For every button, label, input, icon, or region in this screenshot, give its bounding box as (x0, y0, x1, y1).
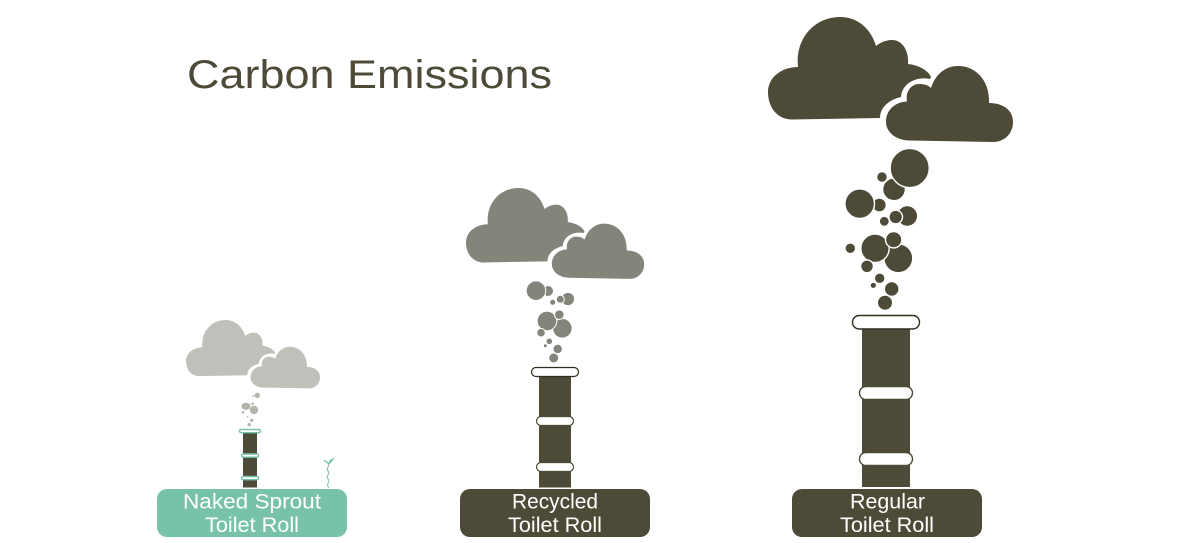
icon: large chimney (852, 316, 920, 487)
icon: dark clouds (768, 17, 1013, 142)
icon: light grey clouds (186, 320, 320, 388)
label: Regular Toilet Roll: Toilet Roll (840, 514, 934, 537)
label: Naked Sprout Toilet Roll (157, 489, 347, 537)
icon: dark smoke bubbles (845, 148, 929, 310)
label: Recycled Toilet Roll: Toilet Roll (508, 514, 602, 537)
icon: sprout (324, 458, 334, 488)
label: Recycled Toilet Roll: Recycled (512, 490, 598, 514)
column: Recycled Toilet Roll (460, 188, 650, 537)
label: Regular Toilet Roll: Regular (850, 490, 925, 514)
title: Carbon Emissions (187, 53, 552, 97)
icon: light grey smoke bubbles (241, 393, 260, 426)
column: Regular Toilet Roll (768, 17, 1013, 537)
icon: small chimney with teal bands (240, 430, 260, 488)
label: Recycled Toilet Roll (460, 489, 650, 537)
icon: mid grey smoke bubbles (526, 281, 575, 363)
label: Naked Sprout Toilet Roll: Naked Sprout (183, 490, 321, 514)
icon: mid grey clouds (466, 188, 644, 279)
label: Naked Sprout Toilet Roll: Toilet Roll (205, 514, 299, 537)
icon: medium chimney (532, 368, 578, 488)
column: Naked Sprout Toilet Roll (157, 320, 347, 537)
label: Regular Toilet Roll (792, 489, 982, 537)
